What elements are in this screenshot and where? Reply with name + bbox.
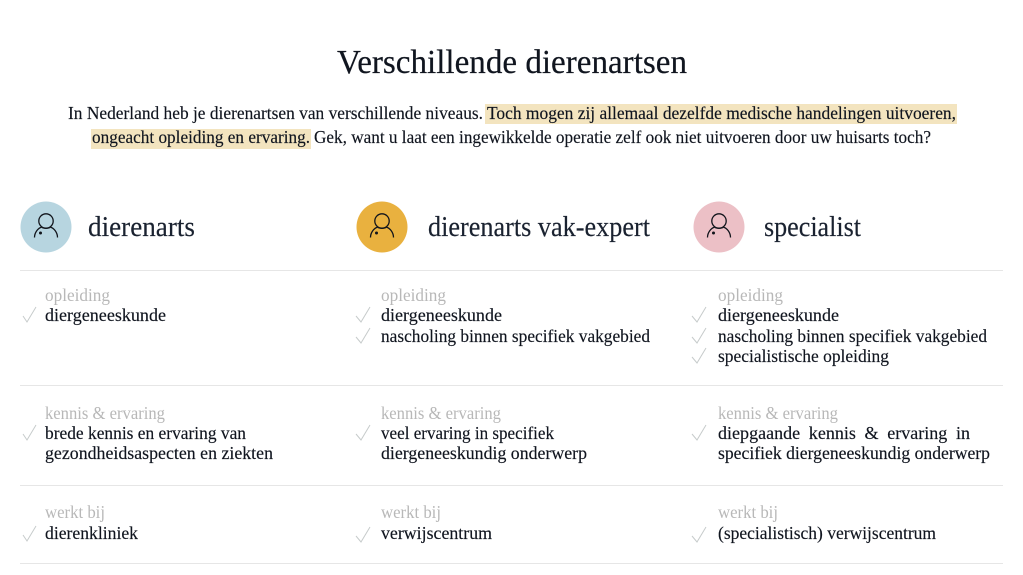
werkt bij xyxy=(692,502,936,543)
column: dierenarts xyxy=(20,202,273,543)
kennis en ervaring: kennis & ervaring xyxy=(718,403,838,423)
intro paragraph: Gek, want u laat een ingewikkelde operatie zelf ook niet uitvoeren door uw huisarts toch? xyxy=(314,127,931,147)
icon: vak-expert person xyxy=(356,202,408,252)
opleiding: nascholing binnen specifiek vakgebied xyxy=(381,326,650,346)
opleiding: diergeneeskunde xyxy=(718,305,839,325)
werkt bij xyxy=(356,502,492,543)
title: Verschillende dierenartsen xyxy=(337,44,687,81)
kennis en ervaring: diergeneeskundig onderwerp xyxy=(381,443,587,463)
werkt bij: verwijscentrum xyxy=(381,523,492,543)
heading: specialist: specialist xyxy=(764,211,861,243)
opleiding: opleiding xyxy=(381,285,446,305)
opleiding: nascholing binnen specifiek vakgebied xyxy=(718,326,987,346)
werkt bij: werkt bij xyxy=(45,502,105,522)
opleiding xyxy=(356,285,650,346)
intro paragraph: Toch mogen zij allemaal dezelfde medische handelingen uitvoeren, xyxy=(487,103,956,123)
intro paragraph xyxy=(68,103,957,149)
opleiding xyxy=(692,285,987,366)
kennis en ervaring xyxy=(356,403,587,463)
kennis en ervaring xyxy=(23,403,273,463)
heading: dierenarts: dierenarts xyxy=(88,211,195,243)
opleiding xyxy=(23,285,166,325)
opleiding: opleiding xyxy=(718,285,783,305)
intro paragraph: In Nederland heb je dierenartsen van verschillende niveaus. xyxy=(68,103,483,123)
werkt bij: dierenkliniek xyxy=(45,523,138,543)
werkt bij: werkt bij xyxy=(718,502,778,522)
opleiding: opleiding xyxy=(45,285,110,305)
opleiding: diergeneeskunde xyxy=(381,305,502,325)
kennis en ervaring: gezondheidsaspecten en ziekten xyxy=(45,443,273,463)
kennis en ervaring: diepgaande kennis & ervaring in xyxy=(718,423,970,443)
icon: specialist person xyxy=(694,202,744,252)
heading: dierenarts vak-expert: dierenarts vak-expert xyxy=(428,211,650,243)
icon: dierenarts person xyxy=(20,202,72,252)
kennis en ervaring: veel ervaring in specifiek xyxy=(381,423,554,443)
kennis en ervaring: brede kennis en ervaring van xyxy=(45,423,246,443)
opleiding: specialistische opleiding xyxy=(718,346,889,366)
opleiding: diergeneeskunde xyxy=(45,305,166,325)
werkt bij: werkt bij xyxy=(381,502,441,522)
kennis en ervaring xyxy=(692,403,990,463)
kennis en ervaring: specifiek diergeneeskundig onderwerp xyxy=(718,443,990,463)
kennis en ervaring: kennis & ervaring xyxy=(381,403,501,423)
intro paragraph: ongeacht opleiding en ervaring. xyxy=(92,127,310,147)
werkt bij: (specialistisch) verwijscentrum xyxy=(718,523,936,543)
column: specialist xyxy=(692,202,990,543)
kennis en ervaring: kennis & ervaring xyxy=(45,403,165,423)
column: dierenarts vak-expert xyxy=(356,202,650,543)
werkt bij xyxy=(23,502,138,543)
